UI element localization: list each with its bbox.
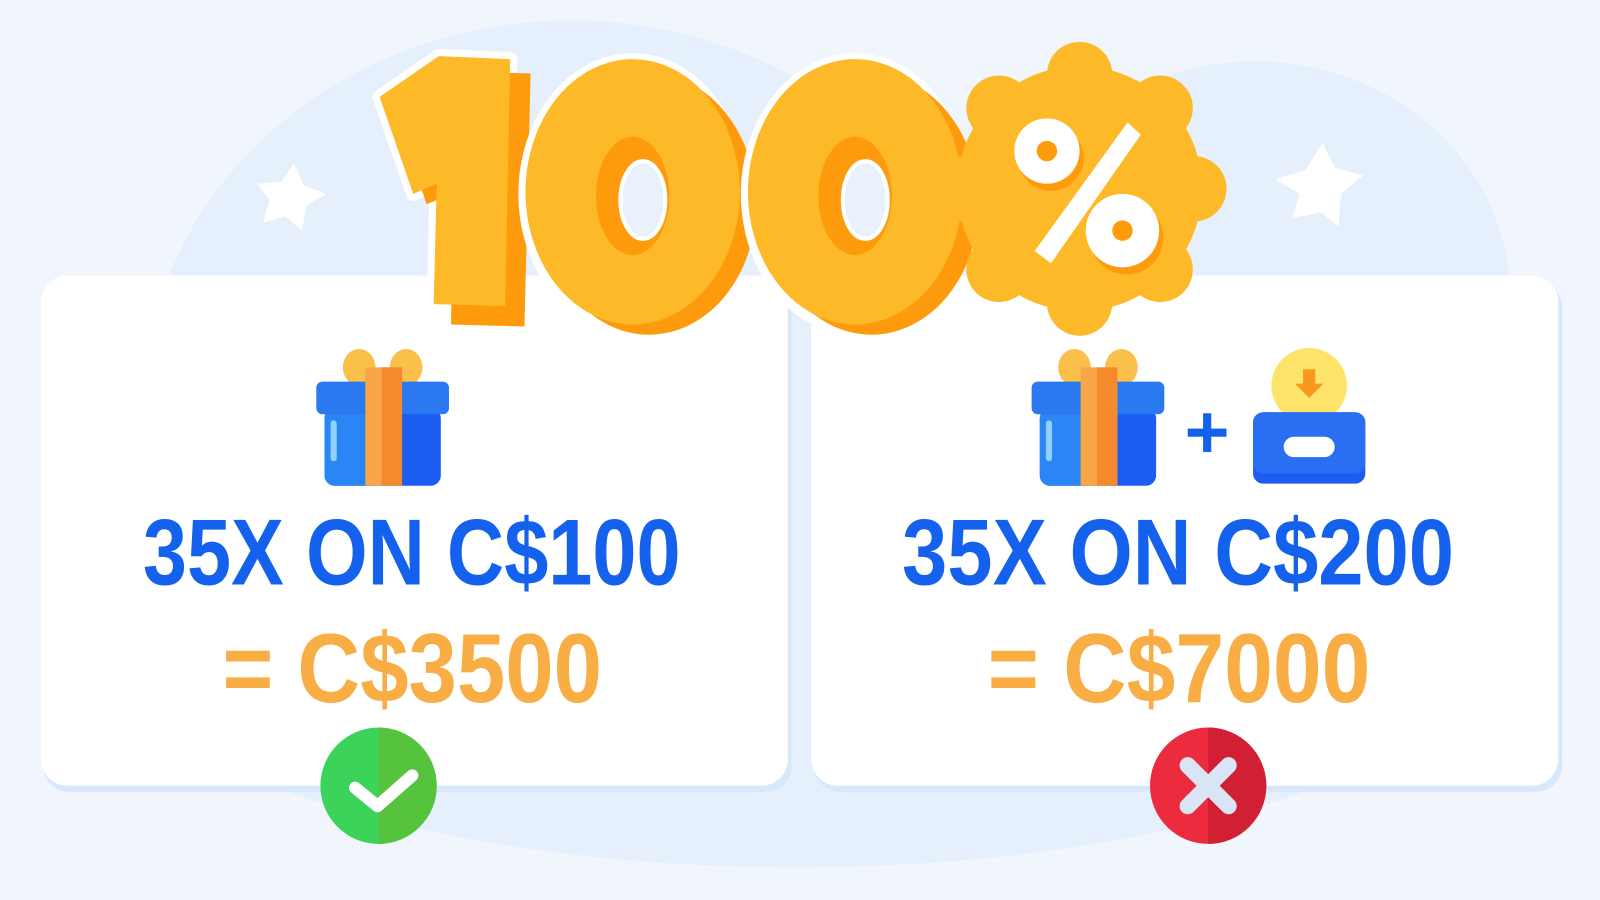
text: = C$7000: = C$7000 (988, 613, 1370, 723)
text: 35X on C$100: 35X ON C$100 (143, 500, 681, 605)
panel: left card (41, 276, 792, 792)
icon: plus (1188, 413, 1227, 452)
text: = C$3500: = C$3500 (222, 613, 602, 723)
digit 1 (380, 56, 531, 327)
icon: deposit wallet (1253, 348, 1365, 484)
text: 35X on C$200: 35X ON C$200 (902, 500, 1454, 605)
title: 100% (380, 42, 1227, 336)
icon: star left (257, 163, 327, 231)
icon: cross (1150, 728, 1266, 844)
digit 0 (518, 53, 756, 335)
panel: right card (811, 276, 1562, 792)
icon: star right (1276, 143, 1363, 227)
icon: gift (316, 349, 449, 486)
icon: gift (1032, 349, 1164, 486)
digit 0 (741, 53, 979, 335)
badge % (933, 42, 1227, 336)
icon: check (320, 728, 437, 844)
